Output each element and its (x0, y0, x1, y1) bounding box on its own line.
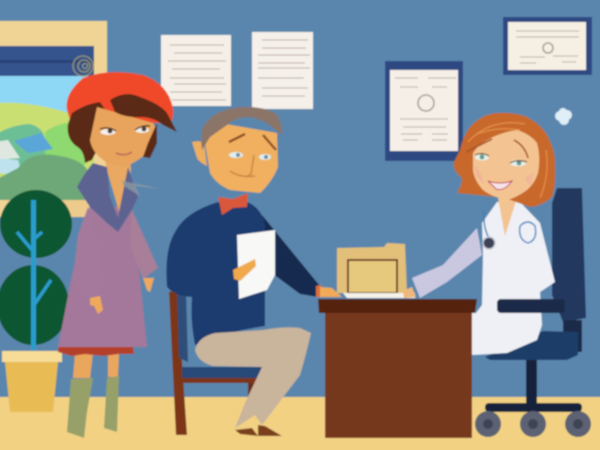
doctor: hand (403, 287, 416, 298)
man: hand on paper (233, 259, 256, 281)
man: red cuff and hand on desk (316, 285, 322, 297)
woman: back hair (68, 102, 112, 163)
swirl on window blind (73, 56, 93, 76)
potted plant (0, 190, 72, 412)
doctor: eyes (475, 154, 527, 166)
doctor: chair armrest (497, 299, 565, 313)
man: sweater (166, 202, 265, 345)
doctor: mouth (488, 181, 512, 190)
man: face (205, 123, 278, 193)
woman in red beret (58, 72, 177, 438)
man: far arm (262, 215, 320, 297)
man: eyebrows (229, 134, 276, 150)
doctor: face (473, 130, 539, 200)
paper notice 2 (252, 32, 313, 109)
doctor: sleeve (412, 228, 482, 298)
woman: mouth (116, 152, 132, 155)
woman: smoke wisp (122, 181, 160, 196)
woman: red skirt (58, 347, 134, 356)
woman: left sleeve (73, 207, 104, 298)
doctor: hair highlights (468, 123, 547, 198)
doctor: cheeks (474, 165, 534, 186)
man: trousers (195, 327, 311, 428)
man: shoes (235, 425, 282, 436)
man: nose and smile (230, 155, 255, 177)
woman: scarf collar (77, 163, 138, 232)
office chair (475, 188, 591, 437)
seated man (166, 107, 342, 436)
framed diploma 1 (385, 61, 463, 161)
woman: boots (67, 376, 119, 438)
man: ear (192, 141, 207, 166)
doctor: eyebrows (466, 139, 528, 158)
desk (318, 299, 477, 438)
doctor: white coat (472, 202, 555, 355)
woman: beret (67, 72, 173, 126)
doctor: neckline (498, 198, 517, 236)
man: eyes (229, 152, 271, 160)
framed diploma 2 (503, 17, 592, 75)
woman: hands (90, 278, 154, 314)
floor (0, 397, 600, 450)
small cloud (555, 108, 572, 125)
woman: neck (105, 160, 131, 215)
woman: side hair (143, 123, 157, 158)
woman: legs (73, 353, 119, 378)
woman: eyes (100, 126, 150, 135)
doctor: hair (454, 113, 555, 207)
woman: right sleeve (130, 210, 158, 279)
woman: coat (58, 205, 147, 347)
folder on desk (337, 243, 415, 298)
window (0, 21, 107, 217)
woman: hair fringe (110, 94, 177, 132)
woman: face (90, 107, 157, 166)
stethoscope (483, 210, 536, 249)
man: collar (218, 193, 248, 215)
paper notice 1 (161, 35, 231, 106)
man: paper held (237, 230, 275, 299)
man: hair (201, 107, 282, 150)
doctor (403, 113, 565, 355)
visitor chair (169, 290, 263, 435)
